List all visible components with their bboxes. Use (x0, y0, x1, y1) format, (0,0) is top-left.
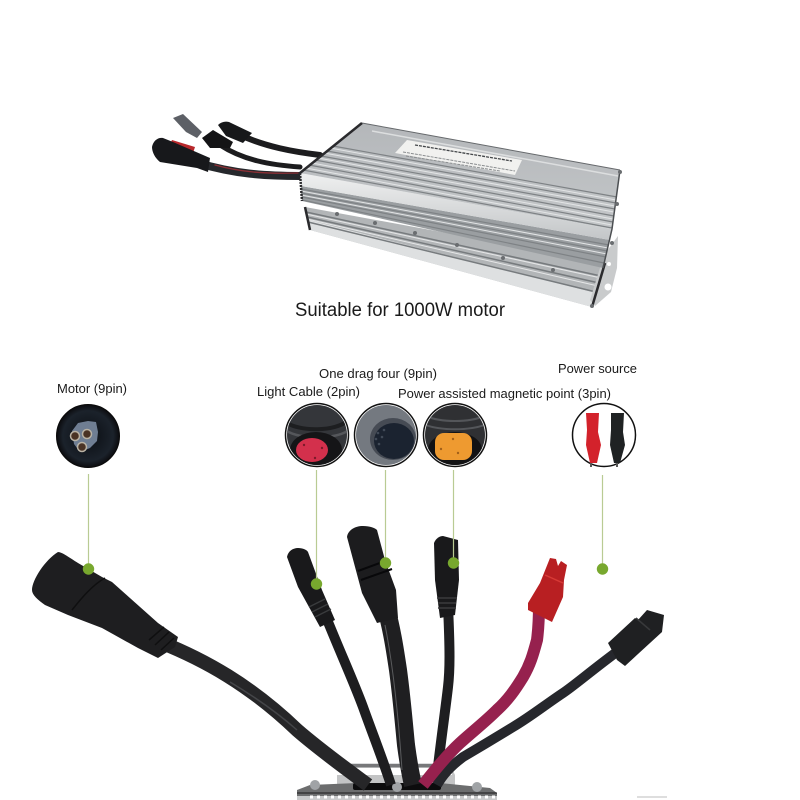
icon: power source connector face (572, 404, 636, 467)
light connector (287, 548, 335, 627)
controller label (395, 140, 522, 175)
label: Motor (9pin): Motor (9pin) (57, 381, 127, 396)
light cable wire (324, 612, 391, 785)
motor connector (32, 552, 178, 658)
red connector (528, 558, 567, 622)
callout line: power source (602, 475, 604, 569)
controller screws (335, 170, 622, 308)
label: Power source: Power source (558, 361, 637, 376)
mounting bracket (590, 236, 618, 306)
caption: Suitable for 1000W motor: Suitable for 1000W motor (295, 300, 506, 321)
callout line: light cable (316, 470, 318, 584)
heat sink ribs (300, 123, 620, 307)
product photo: brushless controller (152, 114, 622, 308)
cables and connectors photo (32, 526, 667, 800)
black power wire (437, 648, 622, 785)
heat sink base (297, 764, 667, 800)
one drag four connector (347, 526, 398, 623)
power assisted wire (437, 606, 450, 775)
icon: one drag four connector face (354, 403, 418, 467)
black connector (608, 610, 664, 666)
callout line: power assisted (452, 470, 454, 563)
icon: power assisted connector face (423, 403, 487, 468)
motor cable (160, 642, 368, 785)
callout line: motor (88, 474, 90, 569)
callout line: one drag four (384, 470, 386, 563)
callout dots (83, 557, 608, 590)
one drag four wire (385, 608, 413, 785)
icon: light cable connector face (285, 403, 349, 468)
label: Power assisted magnetic point (3pin): Power assisted magnetic point (3pin) (398, 386, 611, 401)
icon: motor connector face (56, 404, 120, 468)
red power wire (423, 604, 539, 785)
controller side face (301, 186, 610, 268)
controller small connectors (152, 114, 252, 172)
label: One drag four (9pin): One drag four (9pin) (319, 366, 437, 381)
controller cables (198, 134, 320, 176)
controller lower body (305, 207, 605, 307)
controller top face (300, 123, 620, 229)
power assisted connector (434, 536, 459, 618)
controller bright ridge (300, 173, 612, 240)
label: Light Cable (2pin): Light Cable (2pin) (257, 384, 360, 399)
